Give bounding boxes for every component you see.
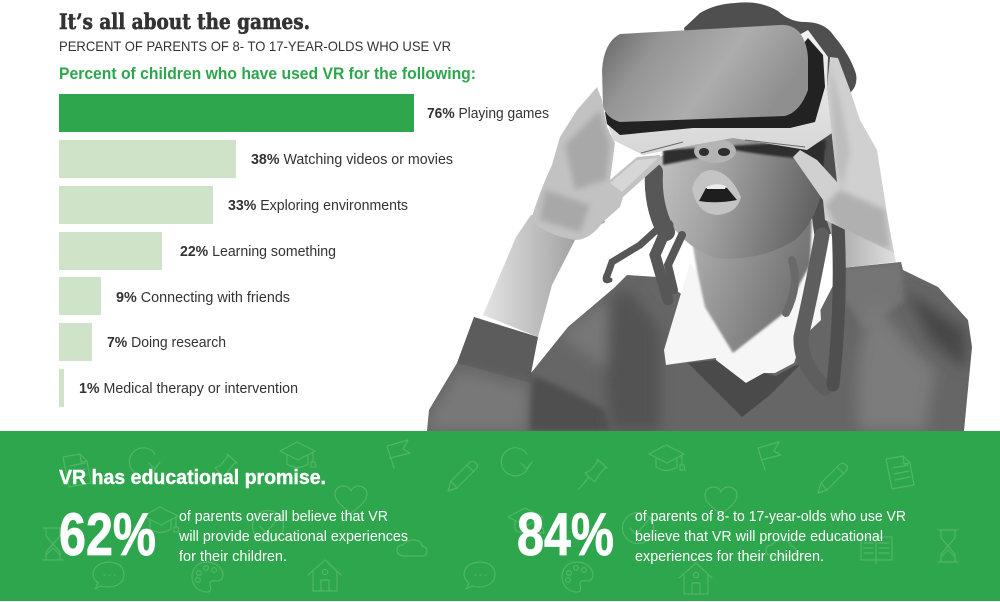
headset — [602, 25, 832, 155]
nose — [694, 139, 736, 163]
bar: playing games — [59, 94, 549, 132]
chart heading: Percent of children who have used VR for the following: — [59, 64, 476, 83]
green band — [0, 431, 1000, 601]
subtitle: PERCENT OF PARENTS OF 8- TO 17-YEAR-OLDS WHO USE VR — [59, 38, 451, 54]
mouth — [692, 170, 741, 215]
stat: 62% — [59, 501, 408, 568]
bar: doing research — [59, 323, 226, 361]
right dreads — [786, 225, 839, 388]
stat: 62%: of parents overall believe that VR — [179, 509, 388, 525]
stat: 84%: believe that VR will provide educational — [635, 529, 883, 545]
stat: 84% — [517, 501, 906, 568]
stat: 84%: of parents of 8- to 17-year-olds who use VR — [635, 509, 906, 525]
photo: child wearing VR headset — [420, 2, 980, 435]
left hair and dreads — [605, 172, 682, 300]
hair — [684, 2, 856, 240]
bar: doing research: 7% Doing research — [107, 335, 226, 351]
section heading: VR has educational promise. — [59, 467, 326, 489]
bar: learning something: 22% Learning something — [180, 244, 336, 260]
sweater — [420, 255, 980, 435]
left hand — [532, 87, 662, 240]
bar: exploring environments: 33% Exploring environments — [228, 198, 408, 214]
collar — [664, 263, 821, 383]
stat: 62%: will provide educational experiences — [178, 529, 408, 545]
stat: 62%: 62% — [59, 501, 156, 568]
bar chart — [59, 94, 549, 407]
bar: medical therapy — [59, 369, 298, 407]
shell seams — [641, 140, 805, 153]
background icon pattern — [43, 440, 958, 594]
bar: exploring environments — [59, 186, 408, 224]
bar: learning something — [59, 232, 336, 270]
bar: watching videos or movies: 38% Watching videos or movies — [251, 152, 453, 168]
bar: connecting with friends — [59, 277, 290, 315]
stat: 62%: for their children. — [179, 549, 287, 565]
white shell — [607, 30, 832, 155]
v-neck ribbing — [688, 360, 801, 417]
stat: 84%: 84% — [517, 501, 614, 568]
right forearm — [825, 215, 896, 268]
neck — [692, 220, 812, 353]
bar: playing games: 76% Playing games — [427, 106, 549, 122]
right hand — [793, 57, 894, 253]
stat: 84%: experiences for their children. — [635, 549, 824, 565]
bar: medical therapy: 1% Medical therapy or intervention — [79, 381, 298, 397]
dark band — [605, 38, 825, 135]
title: It’s all about the games. — [59, 9, 310, 34]
front panel — [602, 25, 808, 122]
left forearm — [483, 215, 605, 337]
bar: connecting with friends: 9% Connecting with friends — [116, 290, 290, 306]
face — [655, 135, 826, 259]
bar: watching videos or movies — [59, 140, 453, 178]
